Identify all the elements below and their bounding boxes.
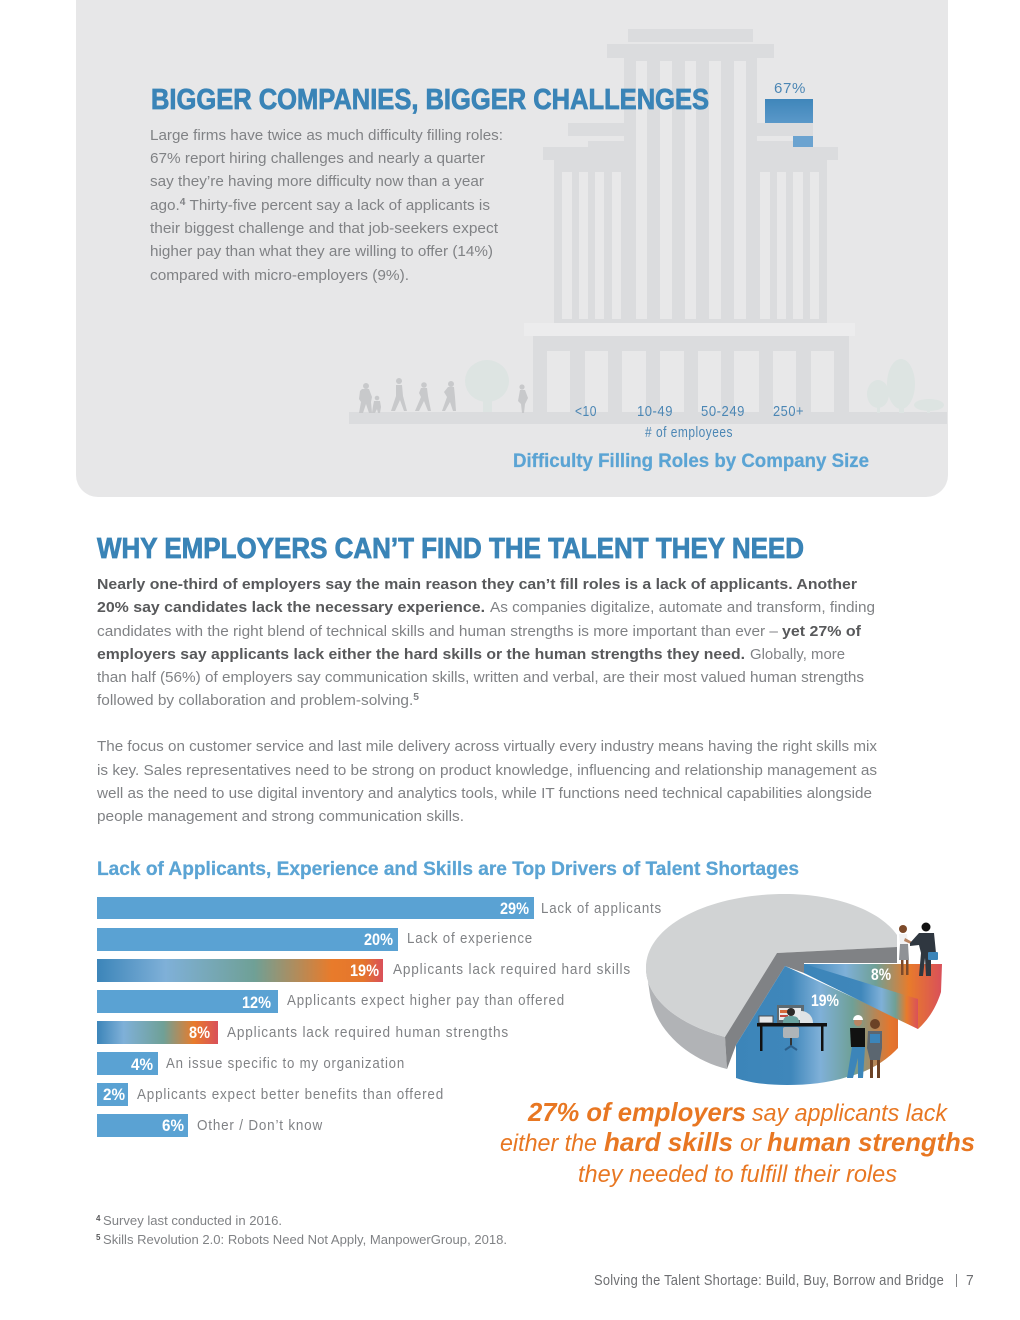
text block: large firms: 67% report hiring challenges and nearly a quarter (150, 150, 485, 167)
bar: other (97, 1114, 323, 1137)
text block: paragraph two: is key. Sales representatives need to be strong on product knowledge, influencing and relationship management as (97, 762, 877, 779)
footer: Solving the Talent Shortage: Build, Buy, Borrow and Bridge (594, 1272, 944, 1289)
text block: paragraph one: 20% say candidates lack the necessary experience. (97, 599, 485, 616)
bar: lack of applicants: 29% (500, 899, 529, 918)
footer: 7 (966, 1272, 974, 1289)
footnotes: Survey last conducted in 2016. (103, 1213, 282, 1228)
text block: paragraph one: than half (56%) of employers say communication skills, written and verbal, are their most valued human strengths (97, 669, 864, 686)
text block: large firms: 4 (180, 197, 186, 208)
text block: paragraph two: well as the need to use digital inventory and analytics tools, while IT functions need technical capabilities alongside (96, 785, 872, 802)
bar: organization issue: An issue specific to my organization (166, 1055, 405, 1072)
callout: 27 percent (500, 1097, 975, 1188)
text block: large firms: their biggest challenge and that job-seekers expect (150, 220, 499, 237)
callout: 27 percent: hard skills (604, 1127, 733, 1157)
bar: organization issue (97, 1052, 405, 1075)
icon: person at desk (757, 1005, 827, 1051)
callout: 27 percent: they needed to fulfill their roles (578, 1161, 897, 1188)
bar: organization issue: 4% (131, 1055, 153, 1074)
chart: difficulty by company size: 10-49 (637, 404, 673, 420)
chart: difficulty by company size: 67% (774, 81, 806, 97)
text block: paragraph two: The focus on customer service and last mile delivery across virtually every industry means having the right skills mix (97, 738, 877, 755)
bar: better benefits: 2% (103, 1085, 125, 1104)
bar: higher pay: 12% (242, 993, 271, 1012)
chart title: top drivers: Lack of Applicants, Experience and Skills are Top Drivers of Talent Shortages (97, 859, 799, 880)
callout: 27 percent: or (740, 1130, 762, 1157)
label: 8 percent: 8% (871, 965, 891, 984)
text block: paragraph one (97, 576, 875, 709)
callout: 27 percent: say applicants lack (752, 1100, 949, 1127)
bar: human strengths (97, 1021, 509, 1044)
text block: paragraph one: candidates with the right blend of technical skills and human strengths is more important than ever – (97, 623, 779, 640)
footnotes: Skills Revolution 2.0: Robots Need Not Apply, ManpowerGroup, 2018. (103, 1232, 507, 1247)
text block: paragraph one: Nearly one-third of employers say the main reason they can’t fill roles is a lack of applicants. Another (97, 576, 857, 593)
label: 19 percent: 19% (811, 991, 839, 1010)
illustration: pedestrians (359, 378, 528, 413)
bar: human strengths: Applicants lack required human strengths (227, 1024, 509, 1041)
text block: paragraph one: followed by collaboration and problem-solving. (97, 692, 405, 709)
chart title: difficulty filling roles: Difficulty Filling Roles by Company Size (513, 451, 869, 472)
text block: paragraph one: yet 27% of (782, 623, 862, 640)
chart: difficulty by company size (575, 81, 813, 441)
callout: 27 percent: human strengths (767, 1127, 975, 1157)
text block: paragraph two (96, 738, 877, 825)
bar: lack of experience: Lack of experience (407, 930, 533, 947)
chart: difficulty by company size: 250+ (773, 404, 804, 420)
text block: large firms: Large firms have twice as much difficulty filling roles: (150, 127, 503, 144)
text block: large firms: higher pay than what they are willing to offer (14%) (150, 243, 493, 260)
icon: handshake (899, 922, 938, 976)
text block: large firms (150, 127, 503, 284)
illustration: trees (465, 359, 944, 413)
bar: hard skills (97, 959, 631, 982)
text block: paragraph one: employers say applicants lack either the hard skills or the human strengths they need. (97, 646, 745, 663)
bar: better benefits (97, 1083, 444, 1106)
callout: 27 percent: either the (500, 1130, 597, 1157)
bar: other: 6% (162, 1116, 184, 1135)
text block: large firms: Thirty-five percent say a lack of applicants is (186, 197, 490, 214)
bar: better benefits: Applicants expect better benefits than offered (137, 1086, 444, 1103)
bar: higher pay (97, 990, 565, 1013)
footnotes (96, 1213, 507, 1247)
bar: lack of experience (97, 928, 533, 951)
icon: engineers (847, 1015, 882, 1078)
callout: 27 percent: 27% of employers (527, 1097, 746, 1127)
bar: hard skills: 19% (350, 961, 379, 980)
chart: difficulty by company size: # of employees (645, 425, 733, 441)
text block: paragraph one: Globally, more (750, 646, 845, 663)
bar: lack of experience: 20% (364, 930, 393, 949)
illustration: office building (349, 29, 947, 424)
bar: other: Other / Don’t know (197, 1117, 323, 1134)
text block: large firms: compared with micro-employers (9%). (150, 267, 409, 284)
heading: bigger companies: BIGGER COMPANIES, BIGGER CHALLENGES (151, 84, 709, 116)
text block: paragraph two: people management and strong communication skills. (97, 808, 464, 825)
panel: bigger companies (76, 0, 948, 497)
pie chart: skills gap (646, 894, 942, 1085)
heading: why employers: WHY EMPLOYERS CAN’T FIND THE TALENT THEY NEED (97, 533, 804, 565)
bar chart: talent shortage drivers (97, 897, 662, 1137)
text block: paragraph one: 5 (413, 692, 419, 703)
text block: large firms: say they’re having more difficulty now than a year (150, 173, 484, 190)
footnotes: 5 (96, 1233, 101, 1242)
chart: difficulty by company size: <10 (575, 404, 597, 420)
text block: paragraph one: As companies digitalize, automate and transform, finding (490, 599, 875, 616)
bar: hard skills: Applicants lack required hard skills (393, 961, 631, 978)
bar: lack of applicants (97, 897, 662, 919)
bar: higher pay: Applicants expect higher pay than offered (287, 992, 565, 1009)
chart: difficulty by company size: 50-249 (701, 404, 745, 420)
bar: lack of applicants: Lack of applicants (541, 900, 662, 917)
footnotes: 4 (96, 1214, 101, 1223)
bar: human strengths: 8% (189, 1023, 210, 1042)
text block: large firms: ago. (150, 197, 179, 214)
